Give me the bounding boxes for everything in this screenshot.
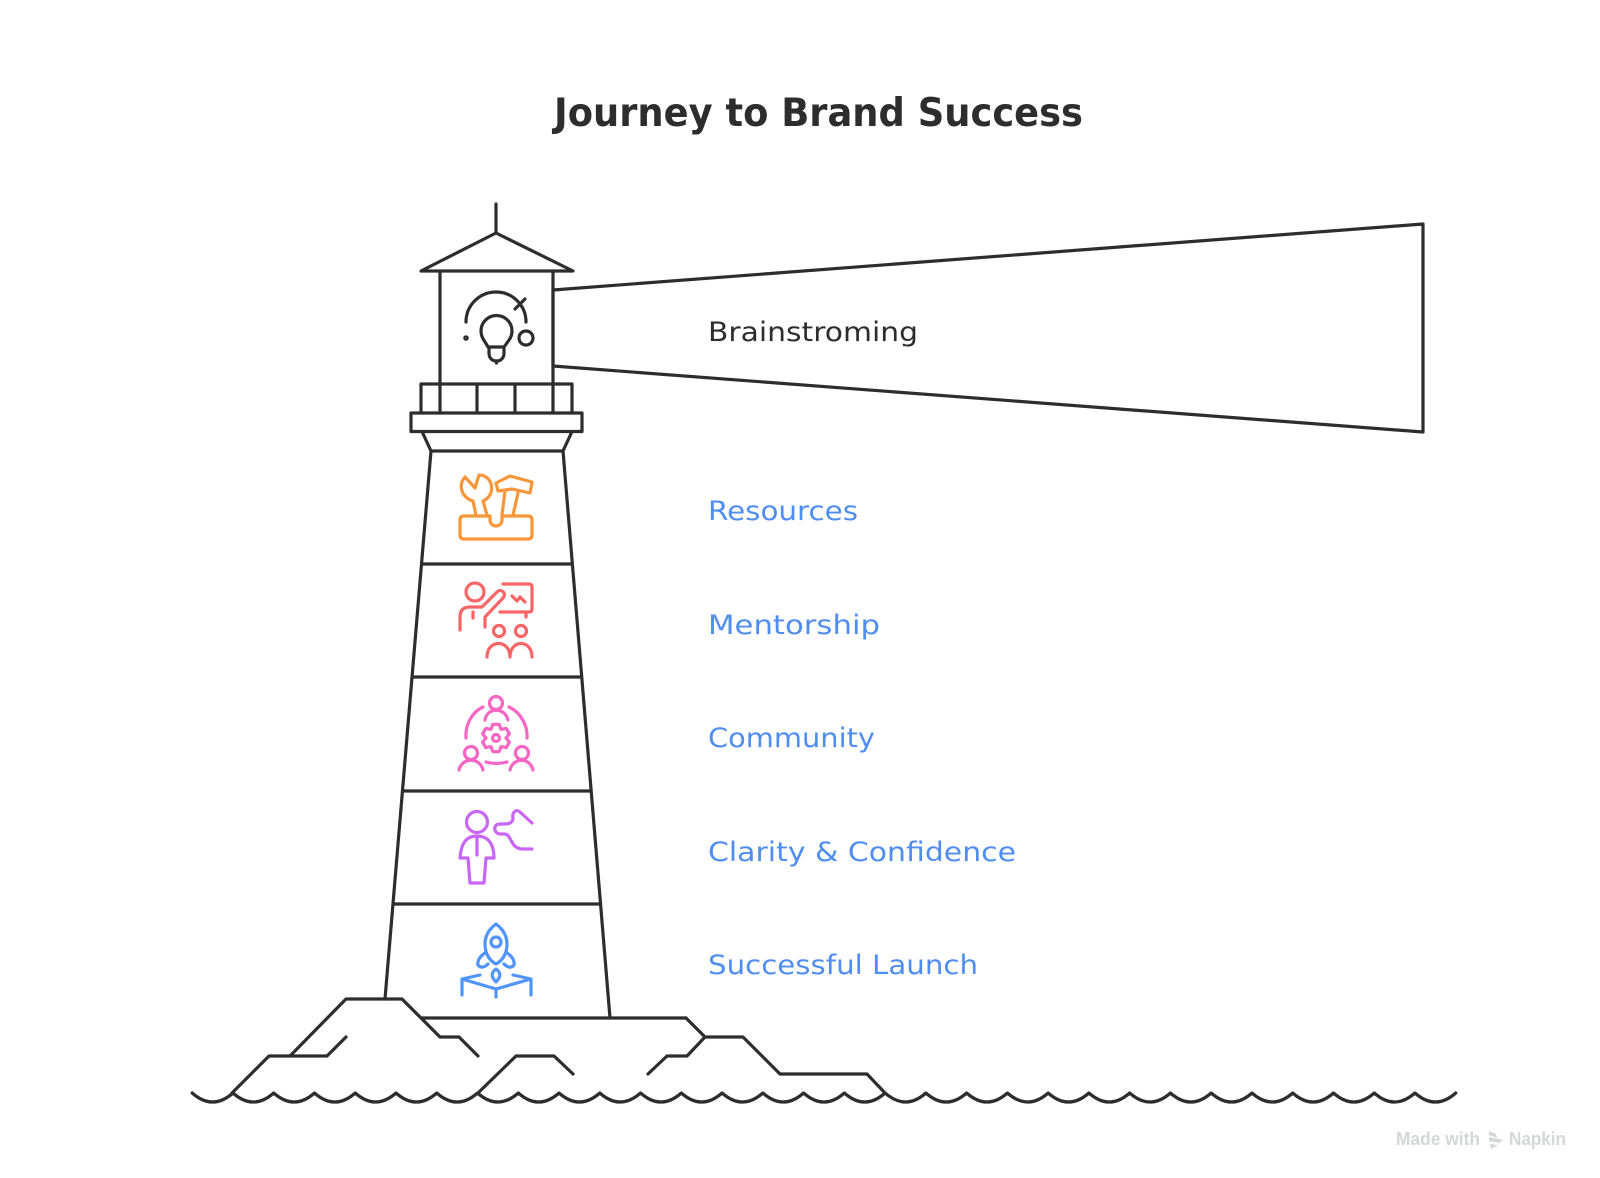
icon: rocket launch <box>462 924 531 997</box>
icon: tools in toolbox <box>460 475 532 539</box>
lighthouse <box>385 204 686 1018</box>
rocks <box>232 999 885 1093</box>
watermark: Made with Napkin: Made with <box>1396 1129 1480 1149</box>
label: Community: Community <box>708 723 875 754</box>
water waves <box>192 1093 1456 1102</box>
watermark: Made with Napkin <box>1396 1129 1566 1149</box>
icon: community around gear <box>459 696 533 770</box>
lighthouse lantern room and roof <box>421 204 573 413</box>
icon: Napkin logo <box>1489 1131 1503 1149</box>
title: Journey to Brand Success <box>551 91 1083 136</box>
watermark: Made with Napkin: Napkin <box>1509 1129 1566 1149</box>
label: Brainstroming: Brainstroming <box>708 317 918 348</box>
icon: person speaking <box>460 811 532 883</box>
light beam <box>553 224 1423 432</box>
label: Successful Launch: Successful Launch <box>708 950 978 981</box>
lighthouse tower <box>385 451 686 1018</box>
label: Clarity & Confidence: Clarity & Confidence <box>708 837 1016 868</box>
icon: mentor presenting to group <box>460 583 532 657</box>
lighthouse gallery platform <box>411 413 582 451</box>
icon: lightbulb <box>465 292 533 363</box>
label: Resources: Resources <box>708 496 858 527</box>
label: Mentorship: Mentorship <box>708 610 880 641</box>
